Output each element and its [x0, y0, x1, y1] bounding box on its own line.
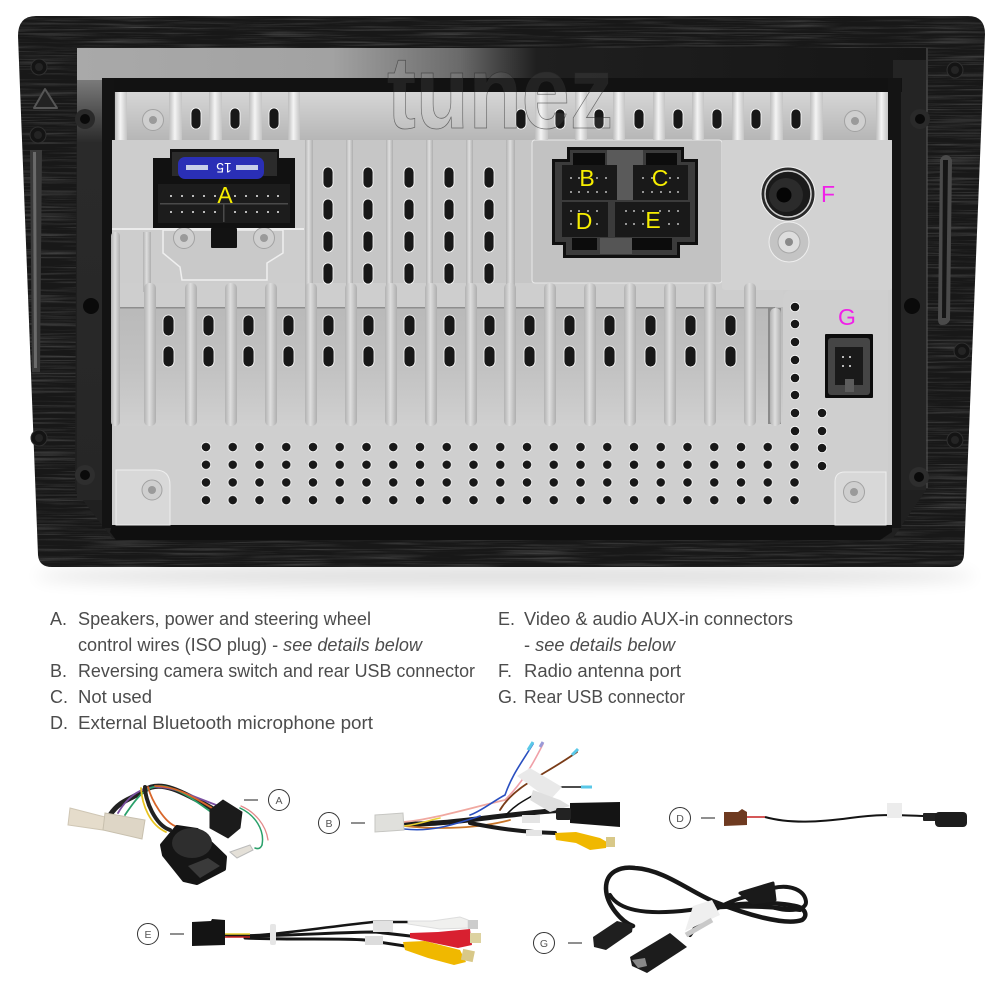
bezel screws and mounting holes [30, 59, 970, 487]
callout E: E [144, 929, 152, 941]
cable G: rear USB lead [593, 868, 806, 973]
port F: radio antenna [761, 167, 815, 262]
legend: right column [498, 609, 793, 707]
labels B C D E: D [576, 208, 592, 234]
top vent ribs and slots [115, 92, 888, 140]
port A: ISO connector with fuse: 15 [216, 160, 232, 176]
cable E: AV input harness [192, 917, 481, 965]
head unit rear photo [18, 16, 986, 586]
callout D [670, 808, 715, 828]
legend: right column: F. [498, 661, 512, 681]
chassis screws [142, 110, 866, 502]
ports B C D E: multi-pin connector [552, 147, 698, 258]
middle vent ribs and slots [305, 140, 515, 290]
callout A: A [275, 795, 283, 807]
legend: right column: - see details below [524, 635, 676, 655]
legend: left column: C. [50, 687, 68, 707]
callout G [534, 932, 582, 954]
callout D: D [676, 813, 684, 825]
legend: left column: A. [50, 609, 67, 629]
legend: right column: E. [498, 609, 515, 629]
callout B: B [325, 818, 333, 830]
legend: right column: Rear USB connector [524, 687, 685, 707]
black brushed bezel [18, 16, 986, 568]
callout E [138, 924, 184, 944]
legend: left column: Speakers, power and steering wheel [78, 609, 371, 629]
silver chassis [112, 92, 892, 525]
label F: F [821, 181, 835, 207]
legend: left column: control wires (ISO plug) - see details below [78, 635, 423, 655]
callout G: G [540, 938, 548, 950]
watermark: tunez: tunez [387, 35, 613, 151]
labels B C D E: C [652, 165, 668, 191]
callout A [244, 790, 290, 810]
label G: G [838, 304, 856, 330]
labels B C D E [576, 165, 668, 234]
perforated holes [193, 302, 827, 509]
legend: left column: B. [50, 661, 67, 681]
callout B [318, 812, 365, 834]
inner metal frame [75, 48, 928, 540]
legend: left column [50, 609, 475, 733]
lower vent ribs and slots [111, 232, 781, 426]
legend: left column: D. [50, 713, 68, 733]
legend: right column: Video & audio AUX-in connectors [524, 609, 793, 629]
cable A: steering wheel control harness [68, 786, 268, 883]
legend: left column: Not used [78, 687, 152, 707]
legend: right column: Radio antenna port [524, 661, 681, 681]
icon: recycle triangle [34, 89, 57, 108]
labels B C D E: B [579, 165, 595, 191]
legend: left column: Reversing camera switch and rear USB connector [78, 661, 475, 681]
legend: left column: External Bluetooth microphone port [78, 713, 373, 733]
legend: right column: G. [498, 687, 517, 707]
port A: ISO connector with fuse [153, 149, 295, 248]
cable D: bluetooth microphone lead [724, 803, 967, 827]
label A: A [217, 182, 233, 208]
port G: rear USB [825, 334, 873, 398]
labels B C D E: E [645, 207, 661, 233]
cable B: reversing camera and USB harness [375, 742, 620, 850]
